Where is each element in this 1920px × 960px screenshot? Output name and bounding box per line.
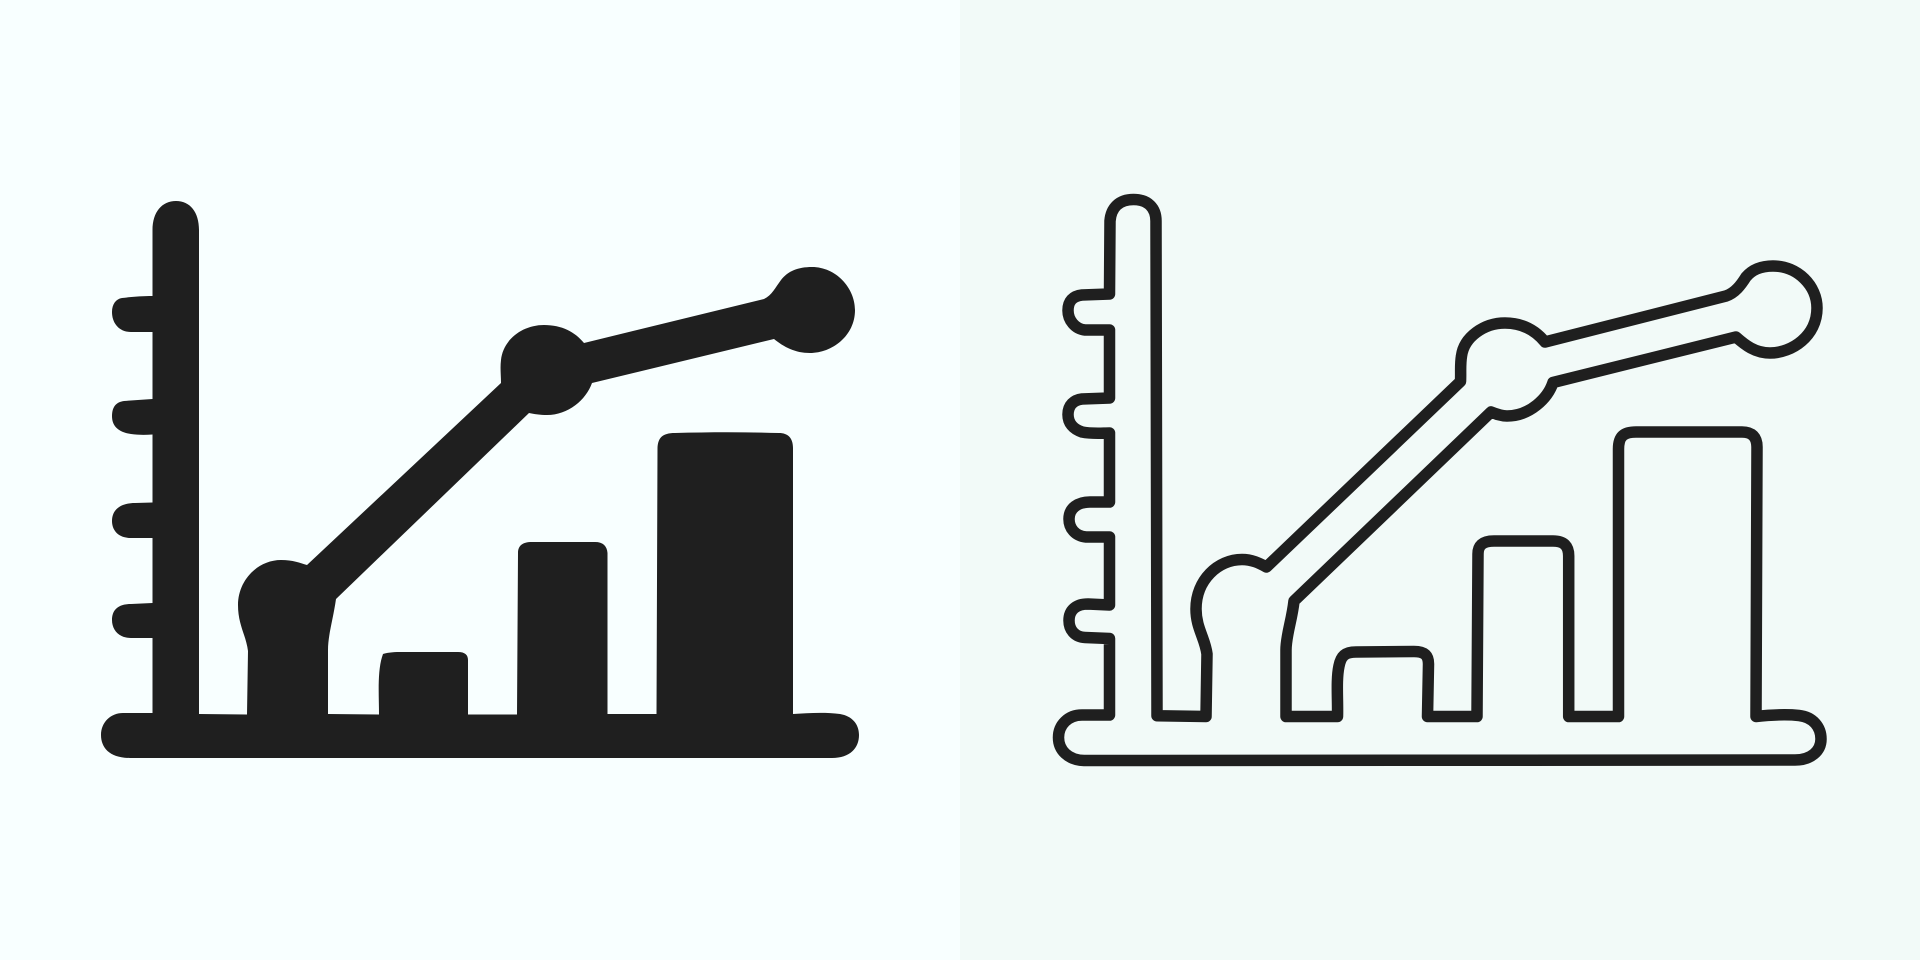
icon: solid bar and line chart (101, 201, 859, 758)
icon: outline bar and line chart (1058, 200, 1821, 760)
panel: outline icon background (960, 0, 1920, 960)
panel: solid icon background (0, 0, 960, 960)
